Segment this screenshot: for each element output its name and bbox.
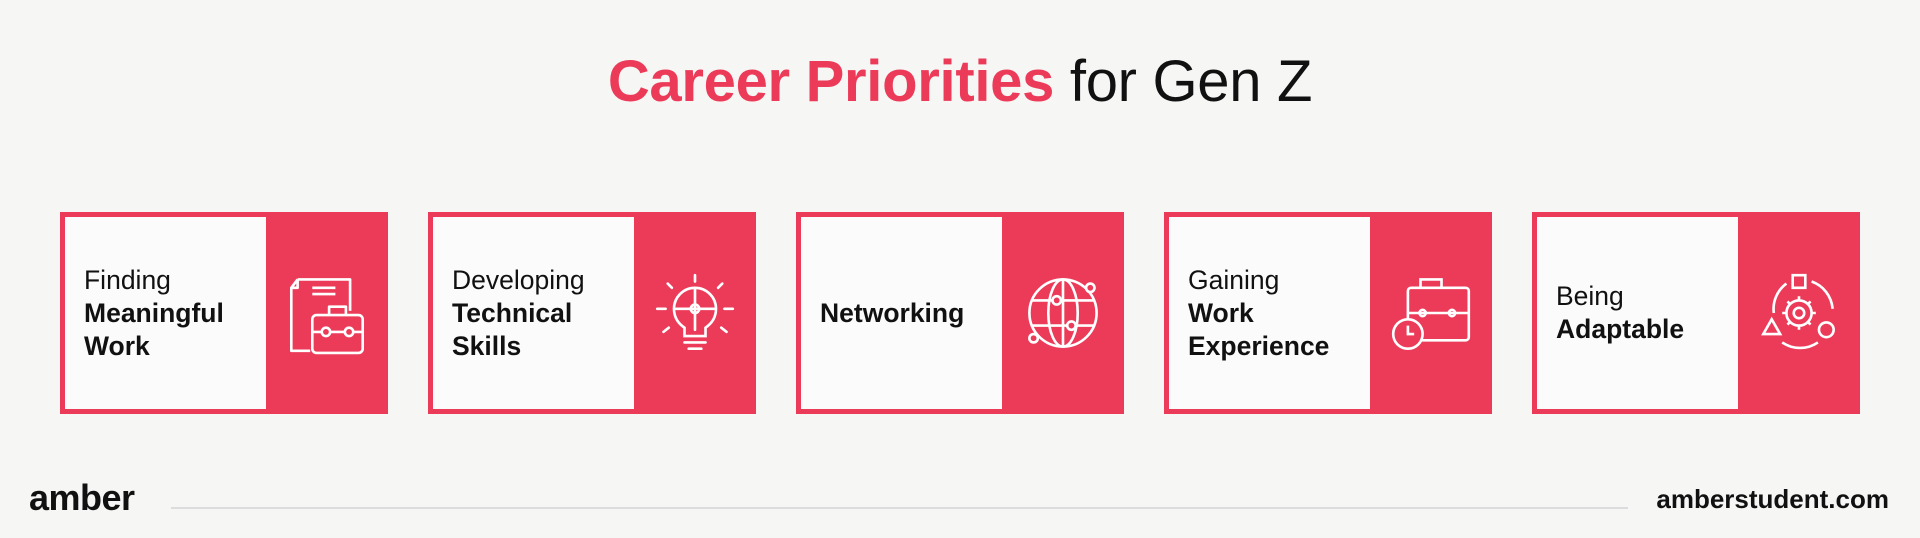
card: technical skills	[428, 212, 756, 414]
card: meaningful work	[60, 212, 388, 414]
icon panel: document and briefcase	[266, 212, 388, 414]
text: finding meaningful work: Work	[84, 330, 150, 360]
text: finding meaningful work: Finding	[84, 264, 171, 294]
footer website: amberstudent.com	[1656, 484, 1889, 514]
text: gaining work experience	[1188, 264, 1329, 360]
icon panel: lightbulb puzzle	[634, 212, 756, 414]
card: work experience	[1164, 212, 1492, 414]
icon panel: briefcase with clock	[1370, 212, 1492, 414]
text: networking: Networking	[820, 298, 964, 328]
text: developing technical skills: Technical	[452, 298, 572, 328]
footer divider	[171, 507, 1628, 509]
title: Career Priorities for Gen Z	[608, 49, 1312, 114]
footer logo: amber	[29, 477, 135, 518]
text: being adaptable: Adaptable	[1556, 314, 1684, 344]
text: finding meaningful work: Meaningful	[84, 298, 224, 328]
text: gaining work experience: Experience	[1188, 330, 1329, 360]
icon panel: globe network	[1002, 212, 1124, 414]
text: gaining work experience: Work	[1188, 298, 1254, 328]
text: developing technical skills	[452, 264, 585, 360]
text: gaining work experience: Gaining	[1188, 264, 1279, 294]
text: developing technical skills: Developing	[452, 264, 585, 294]
text: being adaptable	[1556, 281, 1684, 344]
icon panel: cycle with gear	[1738, 212, 1860, 414]
text: developing technical skills: Skills	[452, 330, 521, 360]
text: finding meaningful work	[84, 264, 224, 360]
card: networking	[796, 212, 1124, 414]
card: adaptable	[1532, 212, 1860, 414]
text: being adaptable: Being	[1556, 281, 1624, 311]
